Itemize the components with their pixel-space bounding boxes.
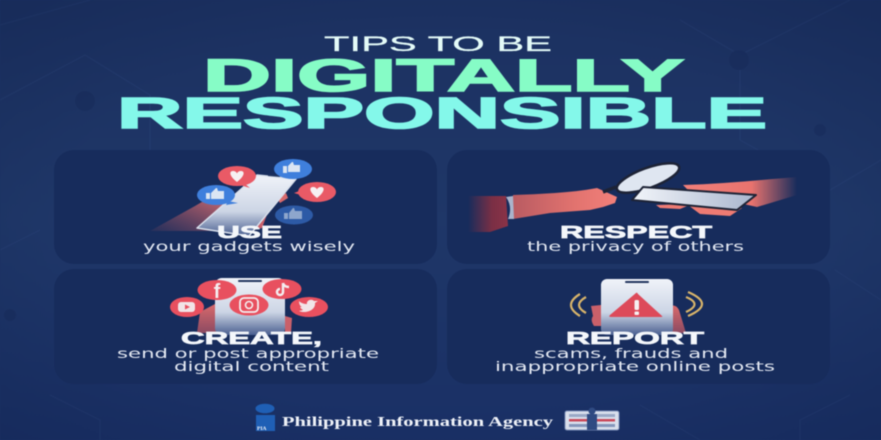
icon: phone with social media — [170, 278, 328, 335]
label: create: CREATE, — [181, 328, 322, 348]
twitter bubble — [290, 297, 328, 317]
footer — [256, 404, 619, 432]
icon: PIA logo: PIA — [257, 426, 266, 432]
text: agency name: Philippine Information Agency — [282, 414, 553, 429]
text: use description: your gadgets wisely — [143, 239, 355, 255]
text: create description: send or post appropriate — [117, 346, 379, 362]
like bubble — [274, 159, 312, 179]
instagram bubble — [230, 294, 268, 316]
title — [117, 33, 767, 138]
text: report description: inappropriate online posts — [495, 359, 775, 375]
panel: respect — [447, 150, 830, 264]
like bubble left — [197, 185, 238, 205]
icon: agency badge — [565, 408, 619, 430]
heart bubble — [218, 166, 256, 188]
icon: PIA logo — [256, 404, 275, 432]
title line: tips to be: TIPS TO BE — [324, 33, 552, 56]
text: report description: scams, frauds and — [534, 346, 728, 362]
title line: digitally: DIGITALLY — [203, 50, 684, 101]
text: create description: digital content — [174, 359, 329, 375]
text: create description — [117, 346, 379, 375]
title line: responsible: RESPONSIBLE — [117, 89, 767, 138]
facebook bubble: f — [214, 281, 221, 303]
heart bubble right — [294, 182, 336, 202]
label: report: REPORT — [566, 328, 705, 348]
youtube bubble — [170, 297, 204, 317]
tiktok bubble — [262, 279, 302, 299]
sound waves right — [686, 292, 702, 316]
text: respect description: the privacy of others — [527, 239, 744, 255]
sound waves left — [571, 294, 586, 316]
warning triangle — [609, 293, 662, 317]
panel: use — [54, 150, 437, 264]
panel: report — [447, 269, 830, 384]
label: respect: RESPECT — [560, 222, 713, 242]
label: use: USE — [217, 222, 282, 242]
icon: magnifier and phone in hands — [468, 157, 797, 232]
panel: create — [54, 269, 437, 384]
like bubble faded — [275, 206, 313, 224]
icon: phone with warning — [571, 279, 702, 335]
text: report description — [495, 346, 775, 375]
facebook bubble — [198, 280, 236, 303]
icon: hand holding phone with reactions — [150, 159, 336, 236]
